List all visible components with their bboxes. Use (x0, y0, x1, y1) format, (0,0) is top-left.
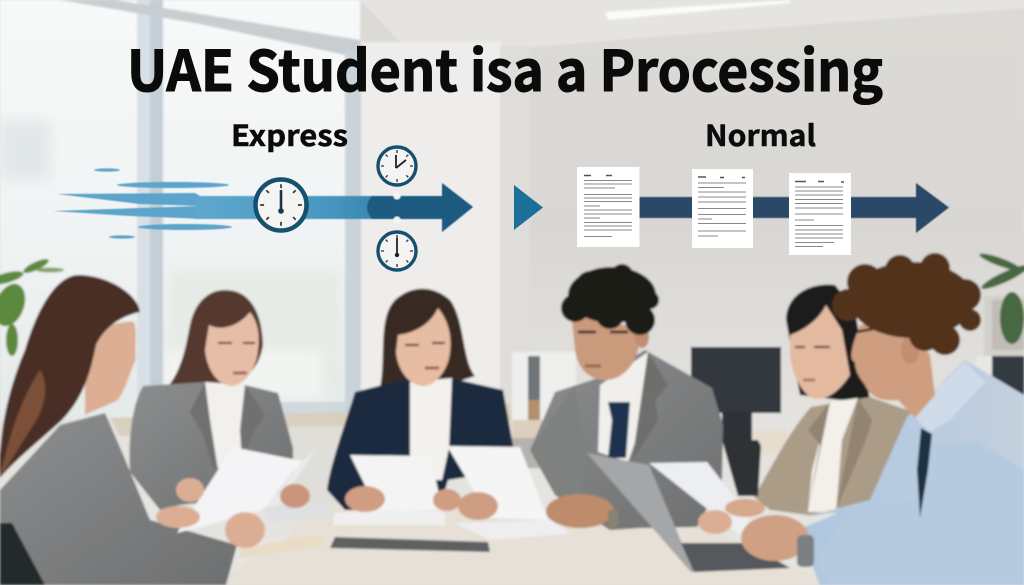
person 3 (327, 289, 513, 510)
chair backs (0, 440, 761, 585)
side wall panel (361, 42, 501, 412)
person 6 (797, 253, 1024, 585)
wrist watches (608, 510, 814, 567)
express arrow (53, 168, 473, 239)
icon: small clock bottom (378, 232, 416, 270)
plants (0, 256, 64, 356)
tablet (330, 537, 490, 552)
table (213, 502, 837, 585)
window (0, 0, 360, 420)
person 4 (530, 264, 723, 530)
title (127, 27, 883, 108)
normal arrow (639, 183, 949, 233)
divider triangle arrow (514, 185, 543, 230)
person 2 (130, 290, 293, 510)
window frame (137, 0, 163, 415)
ceiling light (605, 0, 790, 20)
person 5 (754, 285, 916, 515)
shelf binders (512, 352, 576, 422)
heading: Normal: Normal (705, 113, 816, 155)
laptop (587, 453, 790, 572)
icon: small clock top (378, 147, 416, 185)
icon: large clock (256, 180, 306, 230)
document 3 (789, 173, 851, 255)
papers (177, 446, 750, 558)
hands (156, 478, 809, 561)
person 1 (0, 275, 237, 585)
title: UAE Student (127, 27, 458, 108)
document 1 (577, 167, 640, 247)
ceiling (360, 0, 1024, 50)
right shelf and monitor (976, 296, 1024, 398)
speed streaks (53, 168, 232, 239)
heading: Express: Express (231, 113, 348, 155)
document 2 (692, 169, 753, 248)
window sill (110, 404, 512, 436)
title: isa a Processing (470, 27, 883, 108)
monitor and desk behind (512, 347, 787, 468)
